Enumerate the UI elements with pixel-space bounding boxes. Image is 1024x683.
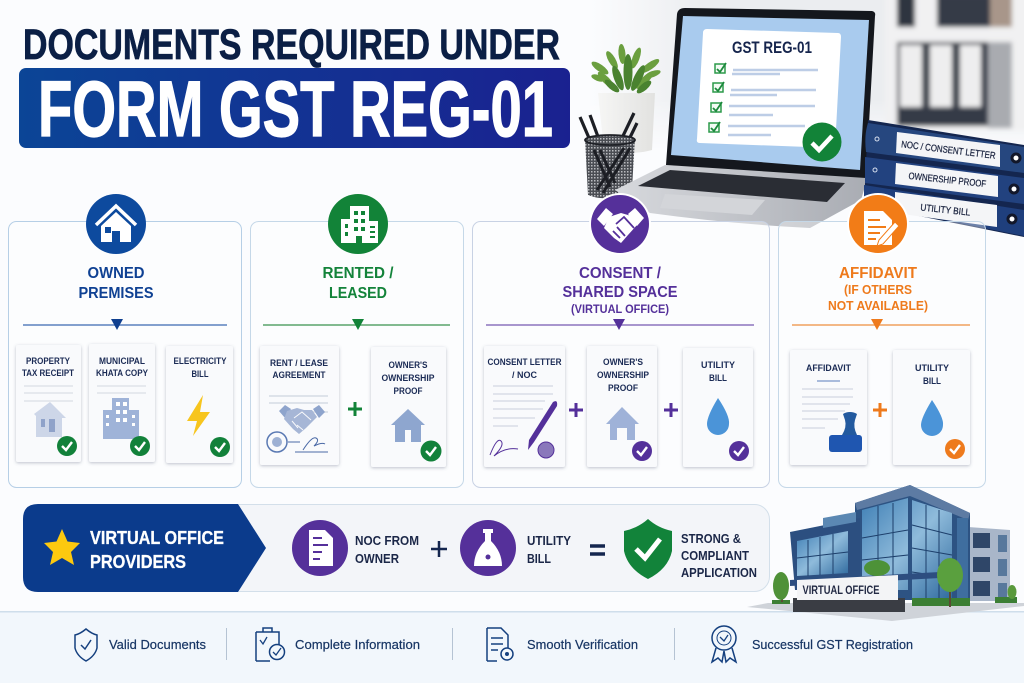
benefit: successful GST registration: Successful GST Registration <box>752 637 913 652</box>
heading: PREMISES <box>78 285 154 302</box>
card: utility bill <box>683 348 753 467</box>
card: property tax receipt: TAX RECEIPT <box>22 368 74 379</box>
arrow banner <box>23 504 266 592</box>
card: rent / lease agreement <box>260 346 339 465</box>
icon: shield <box>624 519 672 579</box>
card: consent letter / NOC <box>484 346 565 467</box>
NOC text: OWNER <box>355 552 399 566</box>
laptop screen <box>671 16 869 170</box>
banner text: VIRTUAL OFFICE <box>90 528 224 548</box>
card: owner's ownership proof: OWNER'S <box>388 360 428 371</box>
virtual office strip <box>23 504 770 592</box>
screen title: GST REG-01 <box>732 38 812 57</box>
benefit: complete information <box>256 628 420 661</box>
banner text: PROVIDERS <box>90 552 186 572</box>
utility text <box>527 534 572 566</box>
benefit: valid documents: Valid Documents <box>109 637 206 652</box>
icon: utility bottle <box>460 520 516 576</box>
shrubs <box>772 597 1017 606</box>
binder 3 <box>864 185 1024 236</box>
card: rent / lease agreement: AGREEMENT <box>272 370 326 381</box>
heading: LEASED <box>329 285 387 302</box>
card: affidavit <box>790 350 867 465</box>
card: electricity bill <box>166 346 233 463</box>
office photo backdrop <box>652 0 1024 132</box>
panel frame <box>8 222 242 488</box>
plus sign <box>348 402 362 416</box>
heading: (VIRTUAL OFFICE) <box>571 302 669 316</box>
card: owner's ownership proof <box>587 346 657 467</box>
trees <box>773 558 1016 607</box>
card: owner's ownership proof: PROOF <box>608 383 638 394</box>
heading: CONSENT / <box>579 265 662 282</box>
binder 1 <box>865 123 1024 173</box>
card: utility bill: BILL <box>923 376 941 387</box>
heading: (IF OTHERS <box>844 283 912 297</box>
icon: house <box>86 194 146 254</box>
main tower <box>855 485 970 600</box>
card: electricity bill: ELECTRICITY <box>174 356 227 367</box>
panel: rented / leased <box>250 194 464 488</box>
label: NOC <box>896 132 1000 167</box>
footer band <box>0 611 1024 683</box>
heading <box>562 265 678 316</box>
title banner <box>19 64 570 153</box>
heading: AFFIDAVIT <box>839 265 917 282</box>
card: electricity bill: BILL <box>192 369 209 380</box>
heading <box>322 265 394 302</box>
binder 2 <box>865 157 1024 204</box>
result text <box>681 532 757 580</box>
cup rim <box>585 135 635 145</box>
label text: NOC: NOC / CONSENT LETTER <box>900 139 996 162</box>
blurred wall <box>652 0 884 122</box>
heading: RENTED / <box>322 265 394 282</box>
trackpad <box>660 194 765 215</box>
divider arrow <box>263 319 450 330</box>
sign <box>797 575 898 600</box>
divider arrow <box>23 319 227 330</box>
heading <box>828 265 928 313</box>
card: property tax receipt: PROPERTY <box>26 356 71 367</box>
right wing <box>968 527 1010 601</box>
card: consent letter / NOC: / NOC <box>512 370 537 381</box>
checklist <box>709 63 818 135</box>
laptop <box>615 8 875 228</box>
building illustration <box>747 485 1024 621</box>
icon: NOC document <box>292 520 348 576</box>
label: ownership <box>895 163 998 197</box>
pen holder <box>580 113 637 198</box>
document on screen <box>697 29 841 148</box>
benefit: complete information: Complete Information <box>295 637 420 652</box>
binder backing <box>864 120 1024 237</box>
result text: APPLICATION <box>681 566 757 580</box>
card: owner's ownership proof <box>371 347 446 467</box>
panel: affidavit <box>778 193 986 488</box>
card: affidavit: AFFIDAVIT <box>806 363 851 374</box>
plus sign <box>569 403 583 417</box>
pens inside cup <box>594 148 630 193</box>
benefit: smooth verification <box>487 628 638 661</box>
icon: handshake <box>589 193 651 255</box>
card: utility bill <box>893 350 970 465</box>
pot <box>598 93 655 153</box>
utility text: UTILITY <box>527 534 572 548</box>
card: utility bill: BILL <box>709 373 727 384</box>
equals sign <box>590 546 605 554</box>
plant <box>590 44 662 153</box>
heading: NOT AVAILABLE) <box>828 299 928 313</box>
card: owner's ownership proof: OWNERSHIP <box>597 370 650 381</box>
divider arrow <box>792 319 970 330</box>
banner text <box>90 528 224 572</box>
heading: OWNED <box>88 265 144 282</box>
plus sign <box>664 403 678 417</box>
card: utility bill: UTILITY <box>701 360 736 371</box>
mesh cup <box>585 134 635 198</box>
blurred bookshelf <box>885 0 1024 130</box>
divider arrow <box>486 319 754 330</box>
tower glass <box>862 498 952 600</box>
icon: star <box>44 529 80 565</box>
pens behind <box>580 113 637 193</box>
leaves <box>590 44 662 91</box>
icon: buildings <box>328 194 388 254</box>
plus sign <box>431 541 447 557</box>
card: municipal khata copy <box>89 344 155 462</box>
binder rings <box>1008 154 1020 223</box>
result text: STRONG & <box>681 532 741 546</box>
entrance canopy <box>790 572 940 586</box>
result text: COMPLIANT <box>681 549 749 563</box>
left wing <box>790 518 860 590</box>
icon: document and pencil <box>847 193 909 255</box>
benefit: successful GST registration <box>712 626 913 662</box>
plus sign <box>873 403 887 417</box>
sign base <box>793 598 905 612</box>
card: owner's ownership proof: OWNERSHIP <box>382 373 435 384</box>
card: rent / lease agreement: RENT / LEASE <box>270 358 328 369</box>
card: owner's ownership proof: OWNER'S <box>603 357 643 368</box>
card: municipal khata copy: MUNICIPAL <box>99 356 145 367</box>
label text: ownership: OWNERSHIP PROOF <box>908 171 987 190</box>
binder stack <box>864 120 1024 237</box>
card: property tax receipt <box>16 345 81 462</box>
card: owner's ownership proof: PROOF <box>394 386 423 397</box>
heading <box>78 265 154 302</box>
screen check badge <box>802 122 842 162</box>
card: consent letter / NOC: CONSENT LETTER <box>488 357 562 368</box>
title line 1: DOCUMENTS REQUIRED UNDER <box>23 21 560 69</box>
utility text: BILL <box>527 552 551 566</box>
heading: SHARED SPACE <box>562 284 678 301</box>
NOC text: NOC FROM <box>355 534 419 548</box>
card: utility bill: UTILITY <box>915 363 950 374</box>
panel: owned premises <box>8 194 242 488</box>
panel: consent / shared space <box>472 193 770 488</box>
NOC text <box>355 534 419 566</box>
handshake illustration <box>279 405 325 434</box>
keyboard <box>638 170 845 202</box>
label text: utility: UTILITY BILL <box>920 202 971 219</box>
benefit: valid documents <box>75 629 206 661</box>
sign text: VIRTUAL OFFICE <box>802 583 880 597</box>
label: utility <box>895 192 997 227</box>
benefit: smooth verification: Smooth Verification <box>527 637 638 652</box>
plaza <box>747 603 1024 621</box>
laptop base <box>615 165 868 228</box>
card: municipal khata copy: KHATA COPY <box>96 368 149 379</box>
title line 2: FORM GST REG-01 <box>38 64 553 153</box>
laptop lid <box>666 8 875 178</box>
